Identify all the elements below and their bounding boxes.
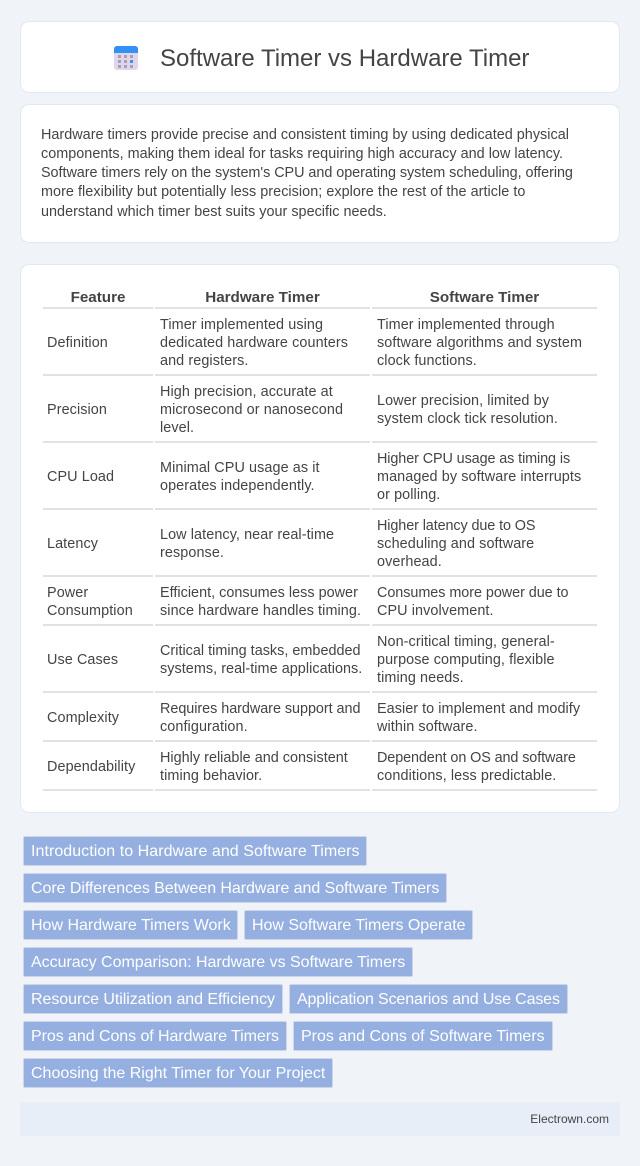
row: use cases: Non-critical timing, general- (377, 634, 555, 650)
row: latency: overhead. (377, 554, 442, 570)
row: dependability (47, 750, 576, 784)
footer credit: Electrown.com (530, 1112, 609, 1126)
tag: application scenarios (289, 984, 568, 1014)
row: precision (47, 384, 558, 436)
tag: accuracy comparison: Accuracy Comparison: Hardware vs Software Timers (31, 954, 405, 971)
comparison table panel (20, 264, 620, 813)
table header: Software Timer (430, 289, 539, 306)
row: complexity (47, 701, 580, 735)
intro paragraph: components, making them ideal for tasks requiring high accuracy and low latency. (41, 146, 563, 162)
row: definition: Definition (47, 335, 108, 351)
row: use cases (47, 634, 555, 686)
tag: introduction: Introduction to Hardware and Software Timers (31, 843, 360, 860)
tag: application scenarios: Application Scenarios and Use Cases (297, 991, 560, 1008)
row: cpu load: managed by software interrupts (377, 469, 581, 485)
row: latency: Latency (47, 536, 98, 552)
row: power consumption: since hardware handles timing. (160, 603, 361, 619)
row: power consumption: Efficient, consumes less power (160, 585, 358, 601)
row: dependability: conditions, less predictable. (377, 768, 556, 784)
tag: introduction (23, 836, 367, 866)
intro paragraph (41, 127, 573, 220)
row: complexity: Easier to implement and modify (377, 701, 580, 717)
row: power consumption: Consumes more power due to (377, 585, 568, 601)
row: cpu load: CPU Load (47, 469, 114, 485)
tag: core differences (23, 873, 447, 903)
row: dependability: timing behavior. (160, 768, 262, 784)
row: complexity: configuration. (160, 719, 248, 735)
intro paragraph: more flexibility but potentially less precision; explore the rest of the article to (41, 184, 525, 200)
tag: accuracy comparison (23, 947, 413, 977)
row: cpu load: Minimal CPU usage as it (160, 460, 320, 476)
row: precision: system clock tick resolution. (377, 411, 558, 427)
row: use cases: Use Cases (47, 652, 118, 668)
row: latency: scheduling and software (377, 536, 534, 552)
row: cpu load: or polling. (377, 487, 440, 503)
row: use cases: purpose computing, flexible (377, 652, 555, 668)
row: precision: Lower precision, limited by (377, 393, 549, 409)
row: definition: and registers. (160, 353, 248, 369)
row: dependability: Highly reliable and consistent (160, 750, 348, 766)
row: latency: response. (160, 545, 224, 561)
row: precision: microsecond or nanosecond (160, 402, 343, 418)
intro paragraph: Hardware timers provide precise and consistent timing by using dedicated physical (41, 127, 569, 143)
row: dependability: Dependent on OS and software (377, 750, 576, 766)
row: dependability: Dependability (47, 759, 135, 775)
tag: pros and cons software: Pros and Cons of Software Timers (301, 1028, 545, 1045)
tag: how hardware timers work (23, 910, 238, 940)
row: power consumption: Power (47, 585, 88, 601)
row: latency: Higher latency due to OS (377, 518, 535, 534)
icon: calendar (114, 46, 138, 70)
row: power consumption (47, 585, 568, 619)
row: complexity: Complexity (47, 710, 119, 726)
row: definition: dedicated hardware counters (160, 335, 348, 351)
tag: resource utilization: Resource Utilization and Efficiency (31, 991, 275, 1008)
row: cpu load: Higher CPU usage as timing is (377, 451, 570, 467)
tag: how hardware timers work: How Hardware Timers Work (31, 917, 231, 934)
row: definition: Timer implemented using (160, 317, 323, 333)
row: precision: High precision, accurate at (160, 384, 333, 400)
row: cpu load (47, 451, 581, 503)
row: power consumption: CPU involvement. (377, 603, 494, 619)
tag: core differences: Core Differences Between Hardware and Software Timers (31, 880, 439, 897)
row: definition (47, 317, 582, 369)
intro paragraph: Software timers rely on the system's CPU and operating system scheduling, offering (41, 165, 573, 181)
row: complexity: within software. (377, 719, 478, 735)
row: power consumption: Consumption (47, 603, 133, 619)
row: complexity: Requires hardware support and (160, 701, 360, 717)
tag: pros and cons software (293, 1021, 553, 1051)
topic tags (23, 836, 568, 1088)
row: precision: Precision (47, 402, 107, 418)
intro paragraph: understand which timer best suits your specific needs. (41, 204, 387, 220)
row: latency: Low latency, near real-time (160, 527, 334, 543)
row: use cases: systems, real-time applications. (160, 661, 362, 677)
tag: how software timers operate (244, 910, 473, 940)
tag: resource utilization (23, 984, 283, 1014)
table header (71, 289, 539, 306)
tag: pros and cons hardware: Pros and Cons of Hardware Timers (31, 1028, 279, 1045)
table header: Hardware Timer (205, 289, 320, 306)
row: latency (47, 518, 535, 570)
header panel (20, 21, 620, 93)
row: use cases: timing needs. (377, 670, 464, 686)
intro text panel (20, 104, 620, 243)
row: cpu load: operates independently. (160, 478, 315, 494)
row: use cases: Critical timing tasks, embedded (160, 643, 361, 659)
footer (20, 1102, 620, 1136)
tag: how software timers operate: How Software Timers Operate (252, 917, 466, 934)
table header: Feature (71, 289, 125, 306)
tag: pros and cons hardware (23, 1021, 287, 1051)
row: precision: level. (160, 420, 194, 436)
row: definition: clock functions. (377, 353, 477, 369)
tag: choosing the right timer (23, 1058, 333, 1088)
title: Software Timer vs Hardware Timer (160, 45, 529, 72)
row: definition: software algorithms and system (377, 335, 582, 351)
row: definition: Timer implemented through (377, 317, 555, 333)
comparison table (43, 289, 597, 791)
tag: choosing the right timer: Choosing the Right Timer for Your Project (31, 1065, 325, 1082)
